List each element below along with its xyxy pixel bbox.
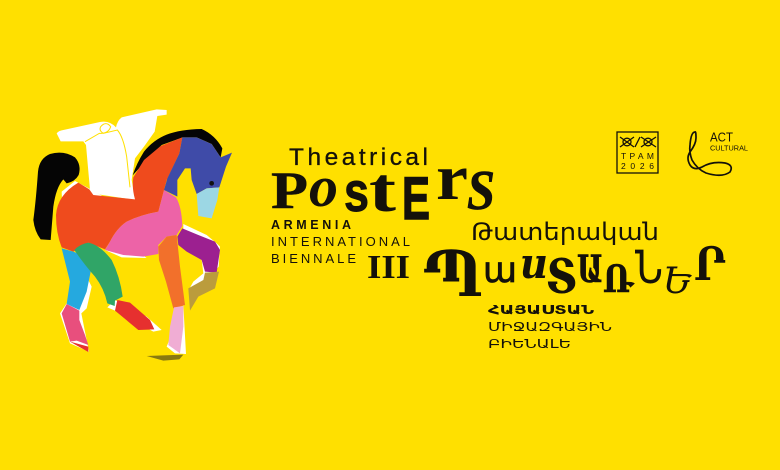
horse mane: black bbox=[133, 129, 222, 175]
Armenian heading: Պաստառներ: Տ bbox=[546, 249, 577, 305]
subtitle: Armenia International Biennale bbox=[271, 218, 410, 266]
wing: white scrolls bbox=[57, 109, 167, 200]
Armenian heading: Թատերական: Թատերական bbox=[471, 218, 659, 246]
horse eye bbox=[209, 181, 214, 186]
logo: Act Cultural bbox=[688, 130, 748, 175]
shadow scribble bbox=[147, 355, 183, 361]
horse tail: black bbox=[33, 153, 80, 240]
Armenian heading: Պաստառներ: Պ bbox=[423, 237, 483, 311]
back hoof tip: red bbox=[70, 342, 88, 352]
Armenian heading: Պաստառներ: Ն bbox=[635, 241, 663, 294]
horse chest: pink bbox=[105, 190, 182, 257]
heading: Theatrical: Theatrical bbox=[289, 144, 428, 171]
horse body: orange-red bbox=[56, 137, 182, 252]
Armenian heading: Պաստառներ: Ռ bbox=[603, 257, 635, 301]
front lower leg: light pink bbox=[168, 306, 183, 353]
Armenian heading: Պաստառներ: Ր bbox=[694, 237, 726, 291]
heading: Posters, mixed letterforms: t bbox=[369, 155, 396, 225]
horse muzzle: pale blue bbox=[197, 187, 219, 218]
front hoof: red bbox=[115, 300, 154, 330]
Armenian heading: Պաստառներ: ս bbox=[520, 239, 548, 288]
heading: Posters, mixed letterforms bbox=[271, 142, 495, 232]
Armenian subtitle: ՀԱՅԱՍՏԱՆ bbox=[488, 302, 594, 317]
heading: Posters, mixed letterforms: r bbox=[436, 142, 468, 214]
front upper leg: orange bbox=[158, 235, 185, 308]
illustration: colourful winged horse bbox=[33, 109, 232, 361]
Armenian heading: Պաստառներ bbox=[423, 237, 726, 311]
heading: Posters, mixed letterforms: s bbox=[344, 160, 369, 223]
logo eyes glyph bbox=[620, 137, 656, 147]
back hoof: pink-red bbox=[62, 304, 88, 345]
leg highlights: white bbox=[60, 224, 220, 354]
Armenian heading: Պաստառներ: Ա bbox=[577, 247, 603, 291]
heading: Posters, mixed letterforms: o bbox=[309, 154, 338, 219]
Armenian heading: Պաստառներ: Ե bbox=[663, 261, 693, 302]
logo: Act Cultural: ACT bbox=[710, 130, 733, 144]
logo: Tram 2026 bbox=[617, 132, 658, 173]
horse back highlight: white bbox=[62, 181, 135, 233]
back leg: green bbox=[74, 243, 123, 306]
logo: Tram 2026: TPAM bbox=[621, 151, 654, 161]
Armenian subtitle: ՄԻՋԱԶԳԱՅԻՆ bbox=[488, 319, 612, 334]
Armenian subtitle bbox=[488, 302, 612, 351]
back leg: cyan bbox=[62, 248, 91, 310]
Armenian heading: Պաստառներ: ա bbox=[483, 250, 517, 291]
numeral III: III bbox=[367, 249, 410, 286]
heading: Posters, mixed letterforms: P bbox=[271, 162, 308, 220]
subtitle: Armenia International Biennale: ARMENIA bbox=[271, 218, 351, 232]
raised foreleg: purple bbox=[177, 228, 220, 273]
heading: Posters, mixed letterforms: S bbox=[467, 160, 495, 222]
heading: Posters, mixed letterforms: E bbox=[402, 165, 430, 232]
subtitle: Armenia International Biennale: INTERNATIONAL bbox=[271, 234, 410, 249]
logo: Act Cultural: CULTURAL bbox=[710, 146, 748, 152]
raised hoof: ochre bbox=[188, 272, 219, 311]
logo: Tram 2026: 2026 bbox=[621, 161, 654, 171]
horse head: blue bbox=[164, 137, 232, 197]
subtitle: Armenia International Biennale: BIENNALE bbox=[271, 251, 356, 266]
Armenian subtitle: ԲԻԵՆԱԼԵ bbox=[488, 336, 571, 351]
